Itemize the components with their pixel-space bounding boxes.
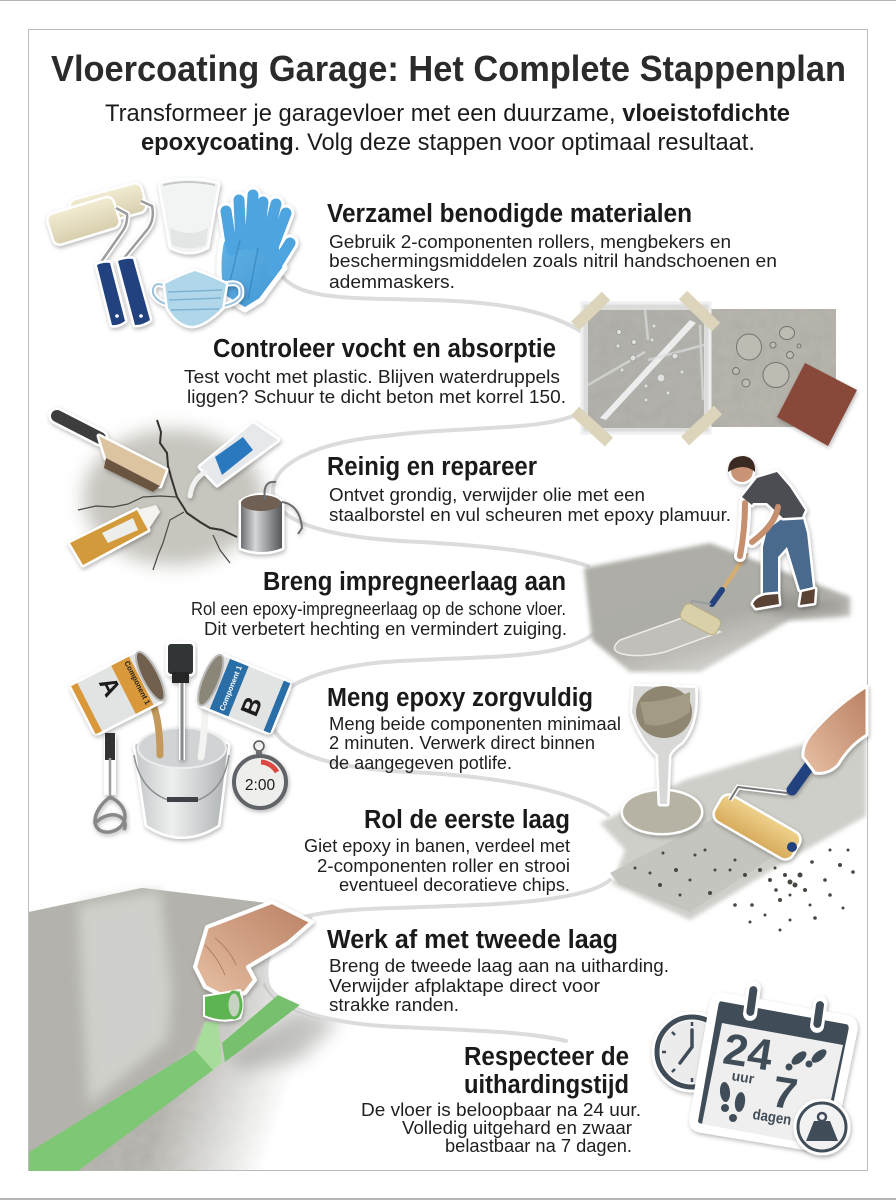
icon: bucket: [134, 728, 229, 836]
icon: calendar: dagen: [751, 1106, 793, 1129]
floor shadow: [770, 594, 845, 616]
icon: calendar: [694, 988, 853, 1148]
step 3 text: [327, 453, 731, 525]
step 5 text: de aangegeven potlife.: [329, 753, 512, 773]
tape strips: [575, 295, 718, 442]
concrete slab: [587, 309, 836, 427]
step 4 illustration: primer on floor: [584, 456, 850, 672]
icon: calendar: 7: [769, 1067, 801, 1120]
epoxy band on floor: [600, 740, 866, 920]
step 4 text: Dit verbetert hechting en vermindert zuiging.: [204, 619, 567, 639]
step 4 text: Rol een epoxy-impregneerlaag op de schone vloer.: [191, 599, 566, 619]
step 5 text: Meng epoxy zorgvuldig: [327, 684, 593, 712]
icon: paint rollers: [47, 183, 153, 325]
step 1 illustration: materials: [47, 180, 290, 326]
icon: metal can with wire: [241, 482, 302, 552]
icon: calendar: 24: [720, 1024, 776, 1081]
step 8 text: uithardingstijd: [464, 1071, 629, 1099]
icon: paint roller: [712, 787, 802, 861]
wet primer strip: [614, 618, 720, 656]
step 3 text: Reinig en repareer: [327, 453, 537, 481]
jeans: [763, 515, 813, 595]
concrete floor: [584, 543, 850, 672]
step 1 text: [327, 200, 777, 292]
step 5 text: 2 minuten. Verwerk direct binnen: [329, 733, 595, 753]
step 3 illustration: cleaning and repair: [57, 416, 302, 570]
icon: orange glue tube: [70, 505, 160, 565]
arms: [740, 503, 778, 556]
step 7 text: Verwijder afplaktape direct voor: [329, 976, 600, 996]
step 3 text: Ontvet grondig, verwijder olie met een: [329, 485, 645, 505]
gloss reflection: [78, 890, 172, 1106]
worker figure: [728, 456, 815, 608]
step 8 text: belastbaar na 7 dagen.: [445, 1136, 632, 1156]
step 6 text: [304, 806, 570, 895]
roller with handle: [678, 553, 747, 637]
step 8 text: [361, 1043, 641, 1156]
sandpaper: [777, 363, 857, 446]
icon: drill mixer: [168, 644, 193, 760]
subtitle: Transformeer je garagevloer met een duurzame, vloeistofdichte: [105, 100, 790, 127]
step 1 text: ademmaskers.: [329, 272, 455, 292]
icon: can A: Component 1: [122, 659, 152, 706]
icon: can B: B: [235, 693, 268, 720]
step 8 text: De vloer is beloopbaar na 24 uur.: [361, 1100, 641, 1120]
boots: [753, 594, 779, 608]
icon: face mask: [153, 271, 241, 326]
icon: blue repair tube: [190, 423, 278, 496]
icon: hand holding tape roll: [195, 902, 312, 1021]
icon: hand with roller grip: [792, 686, 867, 790]
glossy coated area: [29, 888, 265, 1154]
water droplets on concrete: [732, 326, 801, 388]
step 1 text: Verzamel benodigde materialen: [327, 200, 692, 228]
step 2 text: Test vocht met plastic. Blijven waterdruppels: [184, 367, 560, 387]
t-shirt: [742, 472, 805, 518]
step 7 text: strakke randen.: [329, 995, 459, 1015]
icon: mixing cup: [160, 180, 218, 252]
icon: nitrile gloves: [219, 195, 290, 310]
decorative chips: [634, 848, 855, 932]
step 7 text: Werk af met tweede laag: [327, 926, 618, 954]
head: [731, 460, 753, 482]
step 6 text: eventueel decoratieve chips.: [339, 875, 570, 895]
title: Vloercoating Garage: Het Complete Stappenplan: [51, 48, 846, 89]
icon: stopwatch: [234, 741, 286, 808]
icon: footprints: [719, 1047, 829, 1122]
step 4 text: Breng impregneerlaag aan: [263, 568, 566, 596]
step 6 text: 2-componenten roller en strooi: [317, 856, 570, 876]
icon: can A: [71, 648, 170, 734]
step 5 text: [327, 684, 621, 773]
step 3 text: staalborstel en vul scheuren met epoxy plamuur.: [329, 505, 731, 525]
step 2 text: Controleer vocht en absorptie: [213, 335, 556, 363]
plastic sheet: [582, 303, 710, 433]
concrete floor: [30, 888, 298, 1171]
bubble outline: [266, 917, 400, 1027]
icon: calendar: uur: [731, 1067, 756, 1087]
step 7 text: [327, 926, 669, 1015]
pour streams: [152, 702, 205, 757]
icon: clock: [656, 1016, 728, 1088]
step 7 text: Breng de tweede laag aan na uitharding.: [329, 956, 669, 976]
subtitle: epoxycoating. Volg deze stappen voor optimaal resultaat.: [141, 129, 755, 156]
icon: stopwatch: 2:00: [245, 777, 275, 794]
icon: can A: A: [93, 672, 126, 701]
step 2 text: [184, 335, 566, 407]
step 1 text: beschermingsmiddelen zoals nitril handschoenen en: [329, 251, 777, 271]
cracked concrete: [78, 420, 263, 570]
icon: can B: Component 1: [217, 664, 244, 712]
step 8 text: Volledig uitgehard en zwaar: [402, 1118, 632, 1138]
icon: weight badge: [796, 1101, 848, 1153]
icon: paddle mixer: [94, 733, 125, 832]
step 6 illustration: first coat: [600, 686, 867, 932]
step 7 illustration: second coat with tape: [29, 888, 400, 1171]
icon: wire brush: [57, 416, 166, 492]
step 4 text: [191, 568, 567, 639]
step 1 text: Gebruik 2-componenten rollers, mengbekers en: [329, 232, 731, 252]
wet strip: [610, 818, 780, 912]
icon: can B: [193, 652, 290, 733]
step 6 text: Rol de eerste laag: [364, 806, 570, 834]
floor shadow under tape: [228, 1008, 340, 1070]
step 5 illustration: mixing: [71, 644, 290, 836]
connector curves: [265, 272, 610, 1041]
white text bubble: [266, 915, 400, 1027]
icon: pouring can and puddle: [623, 686, 701, 833]
subtitle: [105, 100, 790, 156]
green masking tape: [29, 995, 300, 1171]
step 6 text: Giet epoxy in banen, verdeel met: [304, 836, 570, 856]
step 8 text: Respecteer de: [464, 1043, 629, 1071]
step 5 text: Meng beide componenten minimaal: [329, 714, 621, 734]
step 2 illustration: moisture test: [575, 295, 857, 446]
step 2 text: liggen? Schuur te dicht beton met korrel 150.: [187, 387, 566, 407]
step 8 illustration: curing time: [656, 988, 853, 1153]
